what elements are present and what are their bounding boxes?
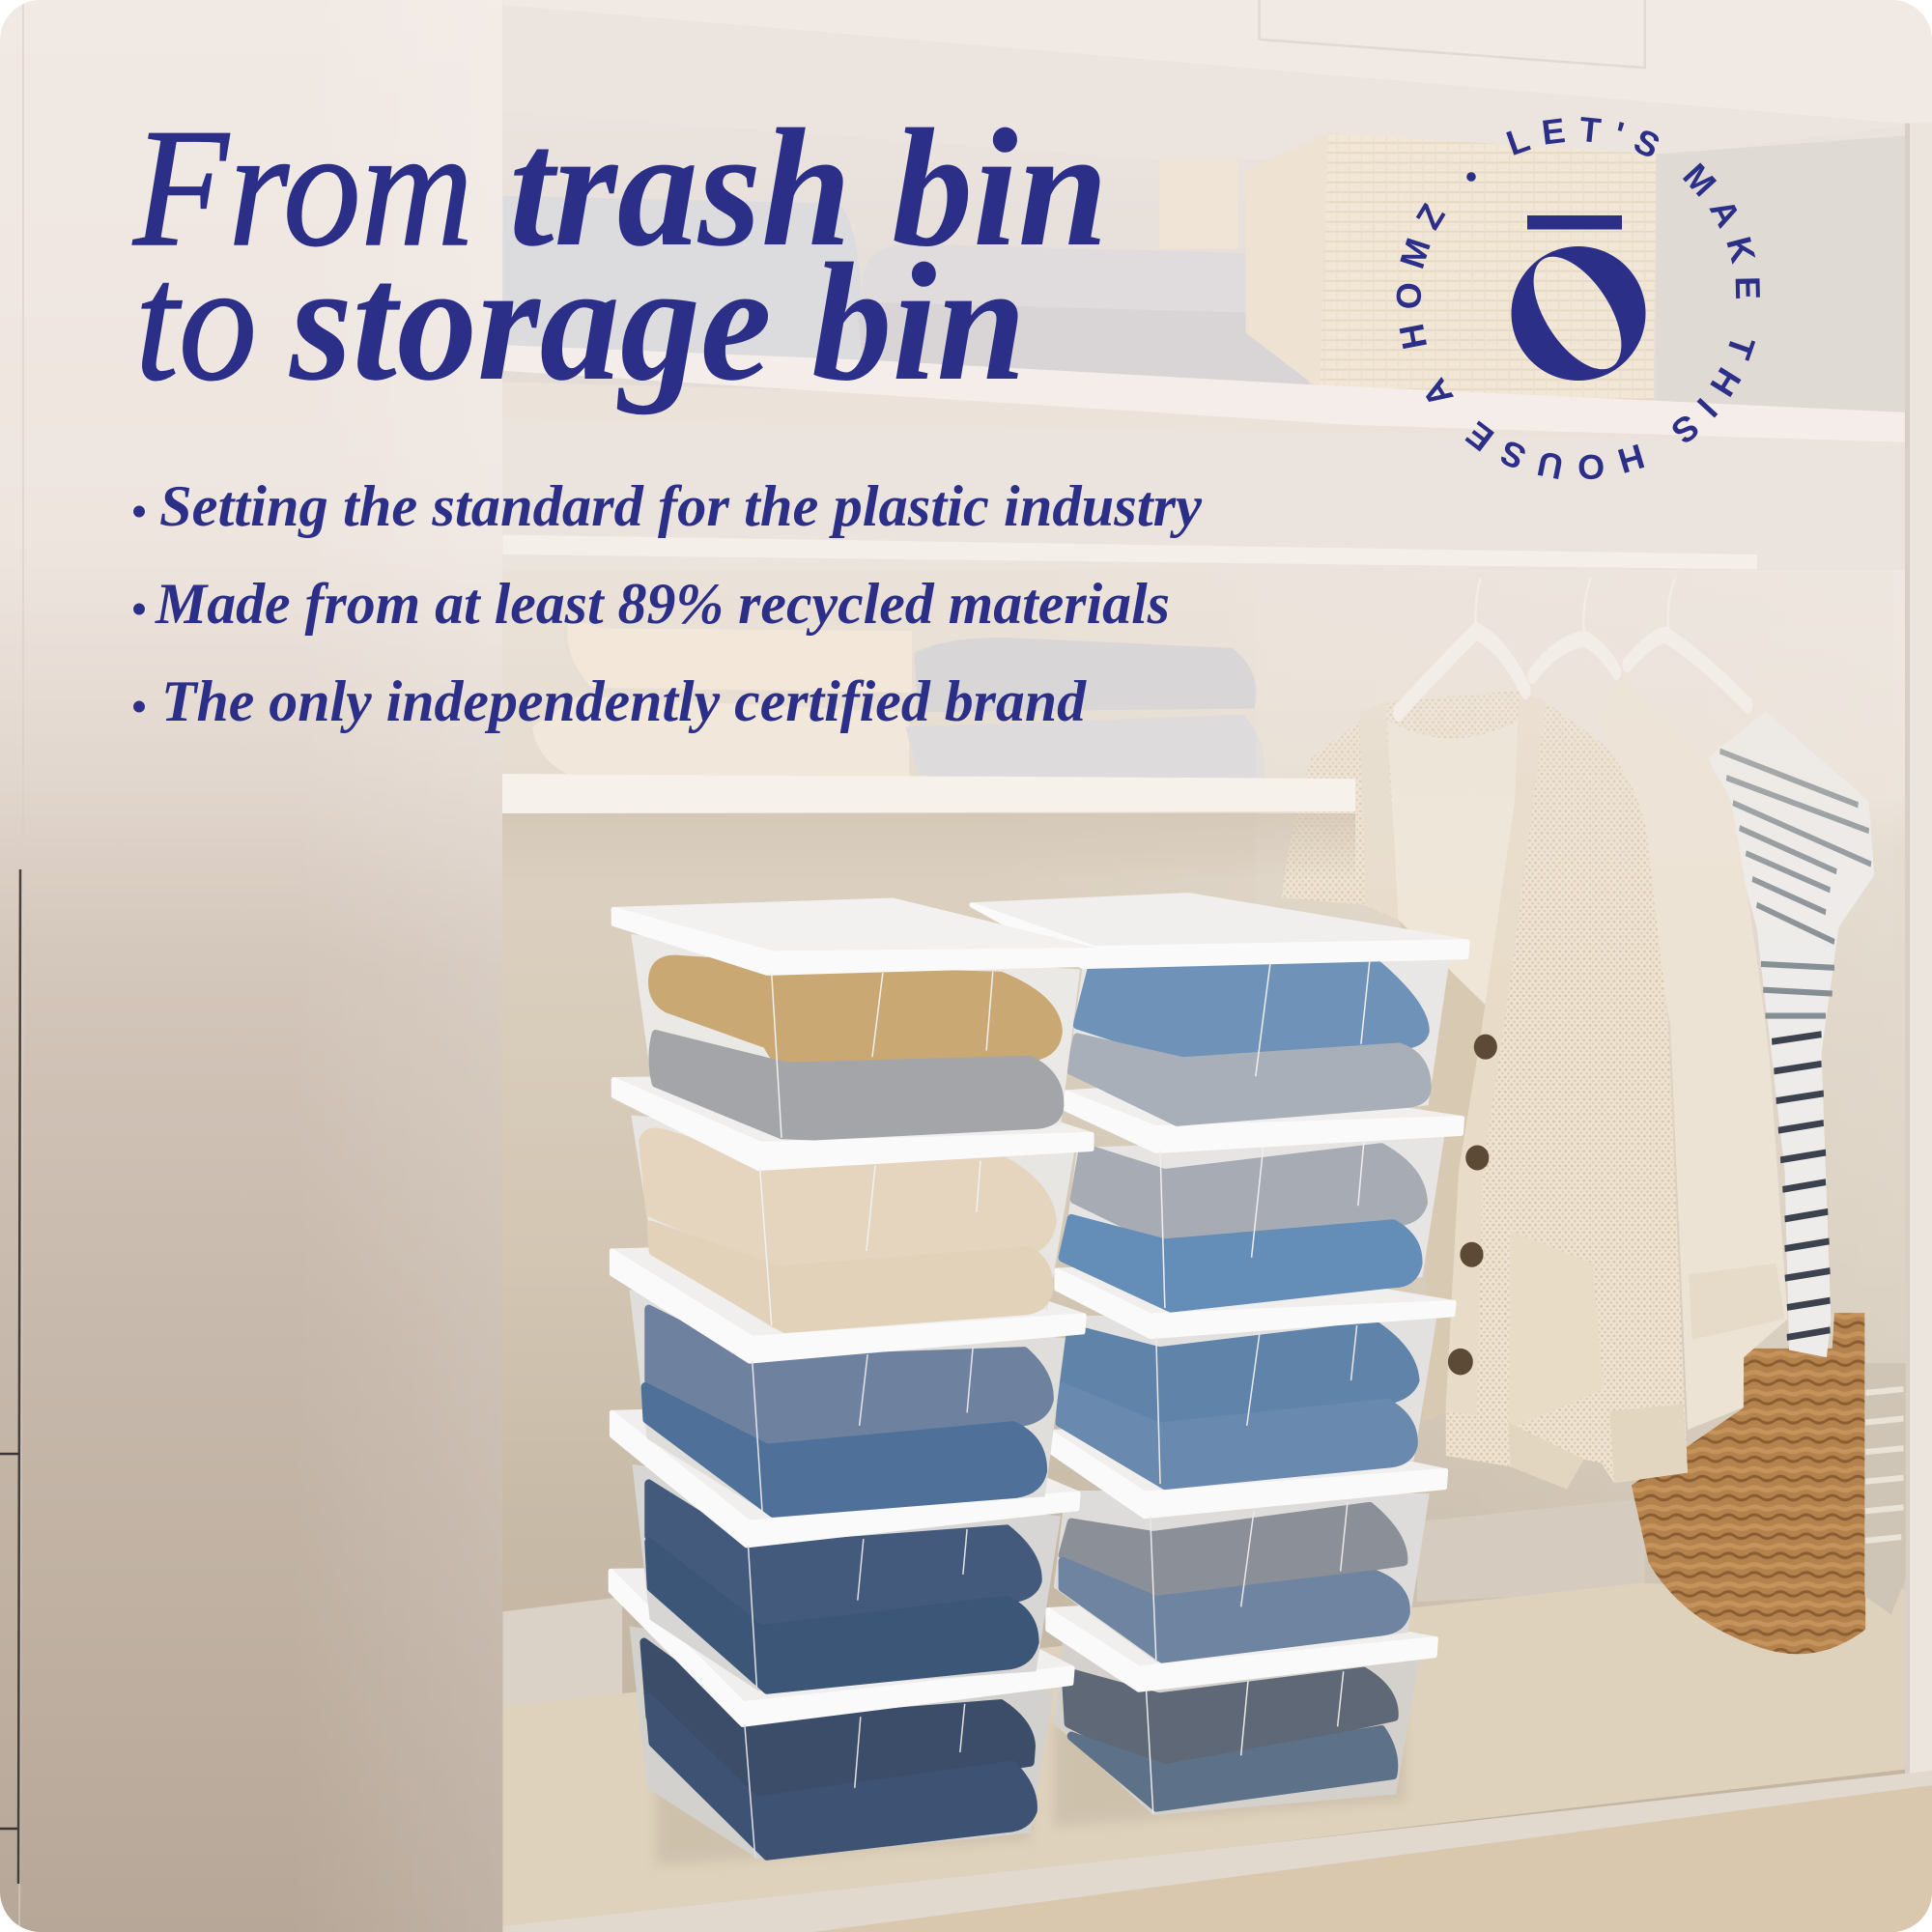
folded knits on lower shelf bbox=[532, 618, 1265, 781]
folded linens on top shelf bbox=[502, 196, 1309, 384]
bullet 2: Made from at least 89% recycled materials bbox=[155, 572, 1170, 636]
blanket fringe bbox=[1864, 1363, 1906, 1614]
front floor sill bbox=[502, 1771, 1932, 1932]
carpet floor bbox=[502, 1583, 1905, 1926]
woven storage basket on top shelf bbox=[1246, 133, 1656, 403]
bin: left column, fourth bbox=[611, 1406, 1078, 1690]
shelf 4 in front of clothes bbox=[502, 774, 1355, 813]
left wall panel bbox=[0, 0, 502, 1932]
cream cardigan bbox=[1282, 691, 1688, 1489]
shelf 2 bbox=[502, 345, 1913, 442]
bin: right column, bottom bbox=[1048, 1601, 1435, 1815]
title line 2: storage bin bbox=[289, 228, 1026, 415]
bin: right column, top bbox=[972, 895, 1467, 1122]
title line 1 bbox=[132, 94, 1108, 281]
title line 1: From bbox=[132, 94, 473, 281]
bin: left column, top bbox=[613, 900, 1095, 1139]
striped shirt bbox=[1709, 711, 1874, 1357]
bullet 3: • bbox=[131, 683, 146, 730]
upper closet shelves bbox=[502, 0, 1932, 1932]
bullet 1: • bbox=[131, 488, 146, 535]
hangers bbox=[1399, 580, 1748, 713]
bin: left column, third bbox=[611, 1244, 1084, 1513]
cream jacket bbox=[1648, 769, 1787, 1430]
bin: right column, fourth bbox=[1051, 1426, 1446, 1662]
circular slogan: LET'S MAKE THIS HOUSE A HOMZ bbox=[1397, 117, 1760, 479]
separator dot bbox=[1466, 172, 1476, 182]
wicker basket bbox=[1632, 1313, 1865, 1654]
title line 1: trash bin bbox=[509, 94, 1108, 281]
shadow under shelf 4 bbox=[502, 813, 1355, 858]
bullet 3: The only independently certified brand bbox=[161, 669, 1087, 733]
hanging clothes and basket bbox=[1282, 672, 1906, 1654]
area below the sill bbox=[813, 1785, 1932, 1932]
stacked clear storage bins bbox=[611, 895, 1467, 1865]
baseboard bbox=[502, 1597, 622, 1707]
back wall of closet bbox=[502, 0, 1932, 1932]
right closet column bbox=[1910, 413, 1932, 1785]
title line 2: to bbox=[135, 228, 257, 415]
bin: left column, bottom bbox=[611, 1568, 1072, 1859]
bullet 1: Setting the standard for the plastic industry bbox=[159, 474, 1202, 538]
logo: o with macron bbox=[1512, 215, 1646, 381]
shelf 3 with hanging rail bbox=[502, 535, 1757, 569]
bullet 2: • bbox=[131, 585, 146, 633]
bin: right column, second bbox=[1063, 1083, 1463, 1309]
title bbox=[132, 94, 1108, 415]
bin: left column, second bbox=[613, 1076, 1092, 1328]
bullet list bbox=[131, 474, 1202, 733]
fade over upper clothes bbox=[1299, 692, 1872, 923]
light falling on right of wall bbox=[1389, 570, 1905, 1607]
brand badge bbox=[1397, 117, 1760, 479]
bin: right column, third bbox=[1057, 1264, 1454, 1487]
cardigan buttons bbox=[1474, 1035, 1497, 1060]
